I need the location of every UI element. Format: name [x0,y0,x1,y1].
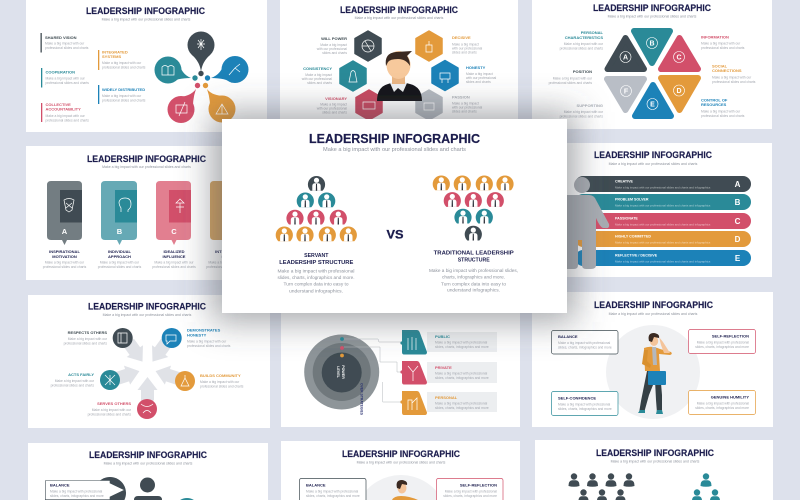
label: position: Make a big impact with our [553,76,593,80]
label: builds community [200,373,244,388]
heading: LEADERSHIP INFOGRAPHIC [88,302,206,312]
panel: lower-left arrows [28,295,270,428]
label: respects others [64,330,108,346]
text block: cooperation: professional slides and charts [46,81,89,85]
bars: D [735,235,741,244]
card C [156,181,191,245]
row: private: slides, charts, infographics and more [435,376,489,380]
label: honesty: Make a big impact [466,72,493,76]
label: idealized influence: professional slides and charts [152,265,196,269]
callout: self-reflection: SELF-REFLECTION [460,482,497,488]
bars: A [735,180,741,189]
triangle letters: D [676,88,682,95]
panel: centre comparison card [222,119,567,313]
bars: PROBLEM SOLVER [615,198,649,202]
panel: bottom-centre [281,441,520,500]
label: honesty [466,65,497,84]
card B: B [117,227,123,236]
card C: C [171,227,177,236]
label: decisive: slides and charts [452,50,477,54]
icon: person [134,478,162,500]
callout: self-reflection: Make a big impact with professional [697,340,749,344]
heading: LEADERSHIP INFOGRAPHIC [594,300,713,310]
label: integrated style: professional slides and charts [206,265,250,269]
label: visionary: slides and charts [322,110,347,114]
panel: bottom-left [28,443,268,500]
heading [86,6,205,22]
triangle letters: F [624,88,629,96]
heading [594,150,712,166]
label: will power: Make a big impact [320,43,347,47]
text block: shared vision: SHARED VISION [45,35,77,40]
label: personal characteristics: professional slides and charts [560,46,603,50]
text block: integrated systems [98,50,146,70]
icon group: teal people [692,473,720,500]
row: private: PRIVATE [435,365,452,370]
heading [340,5,458,20]
label: will power: with our professional [317,47,347,51]
bars: Make a big impact with our professional slides and charts and infographics [615,240,711,244]
label: demonstrates honesty: Make a big impact with our [187,340,227,344]
label: integrated style: STYLE [222,254,235,259]
panel: lower-centre rings [281,300,520,427]
callout: self-reflection: Make a big impact with professional [445,490,497,494]
text block: traditional leadership: Turn complex data into easy to [441,282,507,286]
heading: Make a big impact with our professional slides and charts [611,460,700,464]
triangle hexagon diagram [607,31,698,116]
card B [101,181,137,245]
heading: LEADERSHIP INFOGRAPHIC [594,150,712,160]
text block: collective accountability: COLLECTIVE [46,102,71,107]
heading: Make a big impact with our professional slides and charts [609,162,698,166]
concentric rings chart: POWER [341,365,345,379]
label: information: professional slides and charts [701,46,745,50]
panel: middle-left tabs [26,146,250,280]
illustration: man on phone [638,333,672,414]
teal circle [180,498,194,500]
callout: balance: slides, charts, infographics and more [306,494,360,498]
label: individual approach: Make a big impact with our [100,260,140,264]
illustration: man on phone [392,480,418,500]
card A [47,181,82,245]
row: public: Make a big impact with professional [435,340,487,344]
label: honesty: with our professional [466,76,497,80]
label: supporting: professional slides and charts [560,114,603,118]
heading [342,449,460,464]
label: control of resources: professional slides and charts [701,114,745,118]
concentric rings chart: OVER STRATEGIES [360,383,364,415]
callout: balance: Make a big impact with professional [50,490,102,494]
callout: self-reflection [436,478,503,500]
heading [88,302,206,317]
text block: shared vision [40,33,89,52]
triangle letters: C [676,54,682,62]
callout: balance: slides, charts, infographics and more [50,494,104,498]
callout: self-confidence: Make a big impact with professional [558,402,610,406]
label: idealized influence [152,249,196,269]
label: inspirational motivation: INSPIRATIONAL [49,249,80,254]
label: will power: WILL POWER [321,36,347,41]
label: consistency [302,66,332,85]
bars: C [735,217,741,226]
label: personal characteristics [560,30,604,50]
label: acts fairly [51,372,95,388]
text block: widely distributed: Make a big impact with our [102,94,142,98]
callout: self-reflection [688,330,756,354]
text block: shared vision: Make a big impact with our [45,42,85,46]
panel: top-right triangles [532,0,772,129]
callout: balance: BALANCE [558,334,578,339]
label: individual approach: INDIVIDUAL [108,249,132,254]
text block: integrated systems: professional slides and charts [102,66,146,70]
callout: balance: BALANCE [306,482,326,488]
label: integrated style: Make a big impact with our [208,260,249,264]
text block: collective accountability: Make a big impact with our [46,114,86,118]
heading: LEADERSHIP INFOGRAPHIC [86,6,205,16]
bars: E [735,254,741,263]
text block: servant leadership: Make a big impact with professional [278,268,355,274]
bars: HIGHLY COMMITTED [615,234,651,238]
label: decisive: Make a big impact [452,42,479,46]
heading: Make a big impact with our professional slides and charts [104,462,193,466]
callout: self-reflection: SELF-REFLECTION [712,334,749,338]
heading: LEADERSHIP INFOGRAPHIC [596,448,714,458]
text block: collective accountability: professional slides and charts [46,118,89,122]
label: serves others: SERVES OTHERS [97,401,131,406]
panel: top-centre hexagons [280,0,518,122]
row: public [400,330,497,354]
heading [594,300,713,316]
backdrop circle [606,325,700,419]
label: decisive: DECISIVE [452,35,471,40]
vs label: VS [386,228,404,242]
label: demonstrates honesty: HONESTY [187,332,207,338]
label: passion: slides and charts [452,110,477,114]
heading: Make a big impact with our professional slides and charts [102,165,191,169]
icon circles [100,328,195,419]
subtitle: Make a big impact with our professional slides and charts [323,147,467,153]
bars: REFLECTIVE / DECISIVE [615,254,658,258]
label: serves others: professional slides and charts [88,412,131,416]
callout: balance: BALANCE [50,482,70,488]
label: visionary: with our professional [317,106,347,110]
label: acts fairly: ACTS FAIRLY [68,372,94,377]
concentric rings chart [304,334,402,415]
label: integrated style [206,249,250,269]
label: will power [317,36,347,55]
text block: traditional leadership: Make a big impact with professional slides, [429,268,518,273]
heading: LEADERSHIP INFOGRAPHIC [593,3,711,13]
label: consistency: CONSISTENCY [303,66,332,71]
heading: Make a big impact with our professional slides and charts [355,16,444,20]
hexagon ring [340,31,458,120]
panel: bottom-right [535,440,773,500]
label: respects others: RESPECTS OTHERS [68,330,107,335]
bars: CREATIVE [615,180,634,184]
callout: genuine humility: slides, charts, infographics and more [695,406,749,410]
heading: LEADERSHIP INFOGRAPHIC [342,449,460,459]
label: honesty: slides and charts [466,80,491,84]
label: demonstrates honesty: DEMONSTRATES [187,328,221,332]
callout: balance: slides, charts, infographics and more [558,346,612,350]
label: acts fairly: professional slides and charts [51,384,94,388]
row: personal: PERSONAL [435,395,458,400]
label: information: INFORMATION [701,34,729,40]
label: social connections: Make a big impact with our [712,76,752,80]
text block: servant leadership [278,253,355,294]
label: personal characteristics: Make a big impact with our [564,42,604,46]
label: control of resources: RESOURCES [701,102,727,107]
triangle letters: A [623,54,628,62]
panel: top-left petals [26,0,267,132]
bars: Make a big impact with our professional slides and charts and infographics [615,222,711,226]
heading: Make a big impact with our professional slides and charts [357,460,446,464]
label: passion: Make a big impact [452,102,479,106]
row: personal: slides, charts, infographics and more [435,406,489,410]
label: control of resources [701,98,745,118]
text block: collective accountability: ACCOUNTABILITY [46,106,81,112]
heading: LEADERSHIP INFOGRAPHIC [340,5,458,15]
concentric rings chart: LEVEL [336,366,340,379]
label: inspirational motivation [43,249,87,269]
label: passion: with our professional [452,106,483,110]
converging arrows [114,337,181,400]
label: serves others [88,401,132,416]
text block: traditional leadership [429,250,518,292]
label: position [549,69,593,85]
pyramid: servant structure [276,176,357,241]
callout: self-reflection: slides, charts, infographics and more [695,345,749,349]
label: acts fairly: Make a big impact with our [55,379,95,383]
callout: self-confidence: slides, charts, infographics and more [558,407,612,411]
text block: integrated systems: INTEGRATED [102,50,128,54]
inverted pyramid: traditional structure [433,175,514,240]
row: private [400,361,497,384]
row: personal [400,391,497,415]
heading [87,154,206,169]
text block: collective accountability [41,102,89,122]
label: idealized influence: INFLUENCE [163,254,186,259]
text block: integrated systems: SYSTEMS [102,54,121,59]
triangle letters [620,38,684,110]
triangle letters: B [649,40,655,48]
row: personal: Make a big impact with professional [435,402,487,406]
label: individual approach [98,249,142,269]
chart: five petal diagram [154,32,248,123]
label: individual approach: professional slides and charts [98,265,142,269]
label: supporting [560,103,604,118]
row: private: Make a big impact with professional [435,372,487,376]
callout: balance: Make a big impact with professional [558,341,610,345]
label: consistency: Make a big impact [305,73,332,77]
text block: traditional leadership: STRUCTURE [458,258,490,264]
bars: Make a big impact with our professional slides and charts and infographics [615,260,711,264]
illustration: standing person silhouette [560,177,609,269]
callout: self-reflection: slides, charts, infographics and more [443,494,497,498]
dark ring behind callout [94,477,126,500]
heading: LEADERSHIP INFOGRAPHIC [87,154,206,164]
label: social connections: CONNECTIONS [712,68,742,73]
text block: traditional leadership: TRADITIONAL LEADERSHIP [434,250,514,256]
label: integrated style: INTEGRATED [215,249,241,254]
label: visionary: Make a big impact [320,102,347,106]
label: passion: PASSION [452,94,470,100]
label: idealized influence: Make a big impact with our [154,260,195,264]
label: position: professional slides and charts [549,81,592,85]
text block: servant leadership: understand infographics. [289,288,343,294]
label: will power: slides and charts [322,51,347,55]
label: personal characteristics: CHARACTERISTICS [565,35,603,40]
text block: widely distributed: professional slides and charts [102,98,146,102]
backdrop circle [360,475,442,500]
label: position: POSITION [573,69,592,74]
label: control of resources: CONTROL OF [701,98,728,102]
callout: genuine humility [688,390,756,414]
label: social connections: SOCIAL [712,64,728,68]
label: individual approach: APPROACH [108,254,131,259]
text block: traditional leadership: charts, infographics and more. [442,274,505,280]
label: inspirational motivation: Make a big impact with our [45,260,85,264]
text block: servant leadership: LEADERSHIP STRUCTURE [279,260,354,266]
label: information: Make a big impact with our [701,42,741,46]
callout: genuine humility: GENUINE HUMILITY [711,394,749,400]
text block: traditional leadership: understand infographics. [447,288,500,292]
text block: servant leadership: slides, charts, infographics and more. [278,275,354,280]
heading: LEADERSHIP INFOGRAPHIC [89,450,207,460]
row: public: slides, charts, infographics and more [435,345,489,349]
label: builds community: Make a big impact with our [200,380,240,384]
text block: widely distributed: WIDELY DISTRIBUTED [102,87,145,92]
label: personal characteristics: PERSONAL [581,30,604,35]
label: supporting: SUPPORTING [577,103,603,108]
label: respects others: Make a big impact with our [68,337,108,341]
heading: Make a big impact with our professional slides and charts [609,312,698,316]
label: information [701,34,745,50]
label: social connections [712,64,756,84]
label: consistency: with our professional [302,77,332,81]
card A: A [62,227,68,236]
bars [575,176,751,266]
heading: Make a big impact with our professional slides and charts [103,313,192,317]
triangle letters: E [650,102,655,108]
title: LEADERSHIP INFOGRAPHIC [309,132,480,146]
card D [210,181,240,240]
label: builds community: professional slides and charts [200,384,244,388]
heading [596,448,714,464]
label: idealized influence: IDEALIZED [163,249,185,254]
heading [89,450,207,466]
bars: B [735,198,741,207]
heading [593,3,711,18]
callout: balance [552,330,618,354]
heading: Make a big impact with our professional slides and charts [608,14,697,18]
panel: lower-right character [532,292,773,427]
callout: balance [300,478,366,500]
bars: Make a big impact with our professional slides and charts and infographics [615,204,711,208]
label: consistency: slides and charts [307,81,332,85]
heading: Make a big impact with our professional slides and charts [102,18,191,22]
callout: self-confidence: SELF-CONFIDENCE [558,396,596,400]
centre card shadow [212,112,576,322]
label: respects others: professional slides and charts [64,342,107,346]
label: inspirational motivation: MOTIVATION [52,254,77,259]
icon group: dark people [568,473,634,500]
callout: self-confidence [552,392,618,416]
callout: balance [45,480,124,500]
label: serves others: Make a big impact with our [92,408,132,412]
text block: servant leadership: Turn complex data into easy to [284,282,349,286]
callout: balance: Make a big impact with professional [306,490,358,494]
label: passion [452,94,483,114]
bars: Make a big impact with our professional slides and charts and infographics [615,186,711,190]
label: honesty: HONESTY [466,65,486,70]
label: visionary: VISIONARY [325,96,347,101]
row: public: PUBLIC [435,334,450,339]
text block: widely distributed [98,85,146,104]
bars: PASSIONATE [615,216,638,220]
text block: servant leadership: SERVANT [304,253,329,259]
illustration: businessman [377,51,422,101]
text block: integrated systems: Make a big impact with our [102,61,142,65]
callout: genuine humility: Make a big impact with professional [697,402,749,406]
label: social connections: professional slides and charts [712,80,756,84]
text block: shared vision: professional slides and charts [45,46,89,50]
text block: cooperation [41,68,89,88]
label: builds community: BUILDS COMMUNITY [200,373,241,378]
text block: cooperation: COOPERATION [46,70,75,74]
label: demonstrates honesty: professional slides and charts [187,344,231,348]
panel: middle-right stacked bars [560,143,772,277]
label: decisive [452,35,483,54]
label: decisive: with our professional [452,46,483,50]
label: supporting: Make a big impact with our [564,110,604,114]
text block: cooperation: Make a big impact with our [46,76,86,80]
label: inspirational motivation: professional slides and charts [43,265,87,269]
label: demonstrates honesty [187,328,231,348]
label: control of resources: Make a big impact with our [701,110,741,114]
label: visionary [317,96,347,114]
